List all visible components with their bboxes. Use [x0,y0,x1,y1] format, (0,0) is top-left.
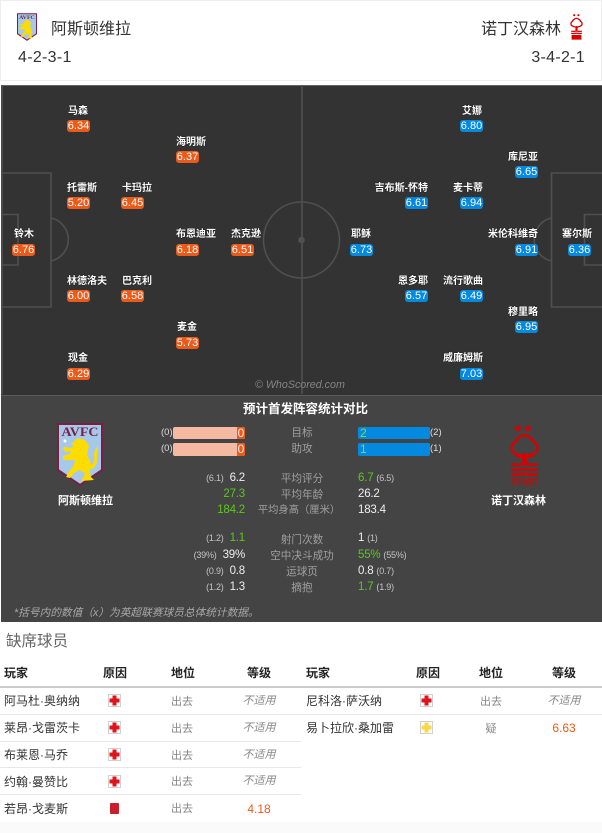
away team label: 诺丁汉森林 [491,495,546,507]
table: home missing players: 等级 [247,666,271,680]
stat values: home: 184.2 [217,504,245,516]
player: 海明斯 [176,136,206,163]
stat values: away: 1 (1) [358,532,378,544]
bar row: goals, home: (0) [161,427,173,438]
row: 约翰·曼赞比: 不适用 [242,775,276,787]
stat labels: 目标 [291,427,313,439]
player: 艾娜: 6.80 [461,120,482,132]
header: team names and formations [0,0,602,81]
player: 林德洛夫: 6.00 [68,290,89,302]
bar row: assists, home [161,442,245,456]
stat values: home: (6.1) 6.2 [206,472,245,484]
row: 若昂·戈麦斯 [0,795,301,822]
stat labels: 平均评分 [281,473,323,485]
player: 流行歌曲: 6.49 [461,290,482,302]
row: 若昂·戈麦斯: 4.18 [247,802,271,816]
player: 杰克逊: 杰克逊 [231,228,261,240]
player: 恩多耶: 6.57 [406,290,427,302]
row: 易卜拉欣·桑加雷: 疑 [486,723,496,735]
home team label: 阿斯顿维拉 [58,495,113,507]
player: 威廉姆斯 [443,352,483,380]
row: 莱昂·戈雷茨卡: 不适用 [242,722,276,734]
icon: Forest crest [510,424,539,487]
player: 马森: 马森 [68,106,88,116]
stat values: away: 26.2 [358,488,380,500]
player: 布恩迪亚 [176,228,216,256]
player: 现金 [67,352,90,380]
bar row: assists, away [358,442,442,456]
icon: Aston Villa small crest [17,13,37,41]
player: 布恩迪亚: 布恩迪亚 [176,228,216,240]
player: 现金: 6.29 [68,368,89,380]
stat labels: 平均年龄 [281,489,323,501]
player: 吉布斯-怀特: 吉布斯-怀特 [375,182,428,194]
stat values: away: 55% (55%) [358,549,406,561]
player: 马森: 6.34 [68,120,89,132]
icon: Aston Villa crest [57,423,103,486]
row: 尼科洛·萨沃纳: 尼科洛·萨沃纳 [306,694,382,708]
row: 阿马杜·奥纳纳: 出去 [171,696,193,708]
player: 海明斯: 海明斯 [176,136,206,148]
stat values: away: 1.7 (1.9) [358,581,394,593]
player: 林德洛夫 [67,274,107,302]
player: 威廉姆斯: 7.03 [461,368,482,380]
player: 杰克逊: 6.51 [232,244,253,256]
table: home missing players [0,666,301,816]
player: 恩多耶: 恩多耶 [398,276,428,286]
player: 托雷斯: 5.20 [68,197,89,209]
player: 杰克逊 [231,228,261,256]
player: 铃木: 铃木 [14,228,34,240]
player: 卡玛拉 [121,182,152,209]
stats title: 预计首发阵容统计对比 [243,402,368,416]
stat values: away: 6.7 (6.5) [358,472,394,484]
player: 巴克利: 6.58 [122,290,143,302]
bar row: assists, home: 0 [238,442,244,456]
player: 米伦科维奇: 6.91 [516,244,537,256]
away team name: 诺丁汉森林 [481,21,561,38]
row: 布莱恩·马乔: 布莱恩·马乔 [4,748,68,762]
player: 米伦科维奇: 米伦科维奇 [488,228,538,240]
player: 艾娜 [460,104,483,132]
row: 莱昂·戈雷茨卡: 出去 [171,723,193,735]
away players [350,104,592,380]
player: 穆里略: 穆里略 [508,306,538,318]
player: 卡玛拉: 6.45 [122,197,143,209]
stat values: home: (1.2) 1.3 [206,581,245,593]
footer band [0,822,602,833]
stat values: home: (0.9) 0.8 [206,565,245,577]
table: home missing players: 原因 [103,666,127,680]
row: 莱昂·戈雷茨卡 [4,721,276,735]
player: 马森 [67,104,90,132]
row: 尼科洛·萨沃纳: 出去 [480,696,502,708]
stat labels: 平均身高（厘米） [258,505,340,516]
row: 易卜拉欣·桑加雷: 易卜拉欣·桑加雷 [306,721,394,735]
row: 易卜拉欣·桑加雷 [301,715,602,741]
bar row: goals, away [358,426,442,440]
player: 耶稣: 耶稣 [351,228,371,240]
heading: missing players: 缺席球员 [6,633,68,650]
stat values: home: 27.3 [223,488,245,500]
icon: Aston Villa small crest: AVFC [19,15,35,21]
player: 托雷斯: 托雷斯 [67,182,97,194]
player: 托雷斯 [67,182,97,209]
player: 现金: 现金 [68,352,88,364]
row: 布莱恩·马乔: 出去 [171,750,193,762]
pitch lines [1,85,602,394]
stat values: away: 183.4 [358,504,386,516]
home formation: 4-2-3-1 [18,48,72,66]
bar row: assists, home: (0) [161,443,173,454]
home team name: 阿斯顿维拉 [51,21,131,38]
player: 塞尔斯: 塞尔斯 [562,228,592,240]
row: 若昂·戈麦斯: 若昂·戈麦斯 [4,802,68,816]
player: 麦金 [176,321,199,349]
row: 莱昂·戈雷茨卡: 莱昂·戈雷茨卡 [4,721,80,735]
table: away missing players [301,660,602,741]
row: 约翰·曼赞比: 出去 [171,776,193,788]
row: 若昂·戈麦斯: 出去 [171,803,193,815]
player: 铃木: 6.76 [13,244,34,256]
player: 艾娜: 艾娜 [462,106,482,116]
row: 易卜拉欣·桑加雷: 6.63 [552,721,576,735]
player: 麦金: 5.73 [177,337,198,349]
bar row: goals, away: 2 [360,426,367,440]
player: 穆里略: 6.95 [516,321,537,333]
bar row: goals, home: 0 [238,426,244,440]
table: away missing players: 等级 [552,666,576,680]
row: 约翰·曼赞比: 约翰·曼赞比 [4,775,68,789]
player: 穆里略 [508,306,538,333]
player: 麦卡蒂: 麦卡蒂 [453,182,483,194]
stat labels: 空中决斗成功 [270,550,334,562]
icon: Forest small crest [570,14,583,40]
table: home missing players: 地位 [171,666,195,680]
panel: starting lineup stats comparison [1,395,602,622]
table: away missing players: 地位 [479,666,503,680]
player: 林德洛夫: 林德洛夫 [67,276,107,286]
bar row: goals, away: (2) [430,427,442,438]
stat labels [258,426,340,594]
footnote: *括号内的数值（x）为英超联赛球员总体统计数据。 [14,607,259,619]
player: 麦金: 麦金 [177,322,197,332]
player: 恩多耶 [398,274,428,302]
player: 卡玛拉: 卡玛拉 [122,182,152,194]
row: 尼科洛·萨沃纳 [301,689,602,714]
player: 米伦科维奇 [488,228,538,256]
stat labels: 摘抱 [291,582,313,594]
stat values: away: 0.8 (0.7) [358,565,394,577]
stat values: home: (39%) 39% [194,549,245,561]
player: 麦卡蒂 [453,182,483,209]
player: 流行歌曲 [443,274,483,302]
bar row: assists, away: 1 [360,442,367,456]
row: 阿马杜·奥纳纳: 不适用 [242,695,276,707]
row: 阿马杜·奥纳纳 [4,694,276,708]
player: 库尼亚: 库尼亚 [508,152,538,162]
player: 塞尔斯 [562,228,592,256]
bar row: assists, away: (1) [430,443,442,454]
row: 阿马杜·奥纳纳: 阿马杜·奥纳纳 [4,694,80,708]
player: 耶稣 [350,228,373,256]
player: 塞尔斯: 6.36 [569,244,590,256]
player: 巴克利 [121,274,152,302]
row: 布莱恩·马乔: 不适用 [242,749,276,761]
home players [12,104,261,380]
player: 铃木 [12,228,35,256]
stat labels: 运球页 [286,566,318,578]
player: 流行歌曲: 流行歌曲 [443,276,483,286]
stat labels: 射门次数 [281,534,323,546]
stat values: home [194,472,245,593]
player: 巴克利: 巴克利 [122,276,152,286]
row: 约翰·曼赞比 [0,768,301,794]
icon: Aston Villa crest: AVFC [62,425,98,439]
player: 布恩迪亚: 6.18 [177,244,198,256]
table: away missing players: 原因 [416,666,440,680]
watermark: © WhoScored.com [255,379,345,391]
panel: pitch with player ratings [1,85,602,395]
player: 库尼亚: 6.65 [516,166,537,178]
stat values: home: (1.2) 1.1 [206,532,245,544]
player: 耶稣: 6.73 [351,244,372,256]
bar row: goals, home [161,426,245,440]
player: 库尼亚 [508,150,538,178]
table: home missing players: 玩家 [4,666,28,680]
player: 威廉姆斯: 威廉姆斯 [443,352,483,364]
player: 吉布斯-怀特: 6.61 [406,197,427,209]
stat values: away [358,472,406,593]
player: 海明斯: 6.37 [177,151,198,163]
away formation: 3-4-2-1 [531,48,585,66]
row: 尼科洛·萨沃纳: 不适用 [548,695,580,707]
player: 吉布斯-怀特 [375,182,428,209]
table: away missing players: 玩家 [306,666,330,680]
player: 麦卡蒂: 6.94 [461,197,482,209]
row: 布莱恩·马乔 [4,748,276,762]
stat labels: 助攻 [291,443,313,455]
